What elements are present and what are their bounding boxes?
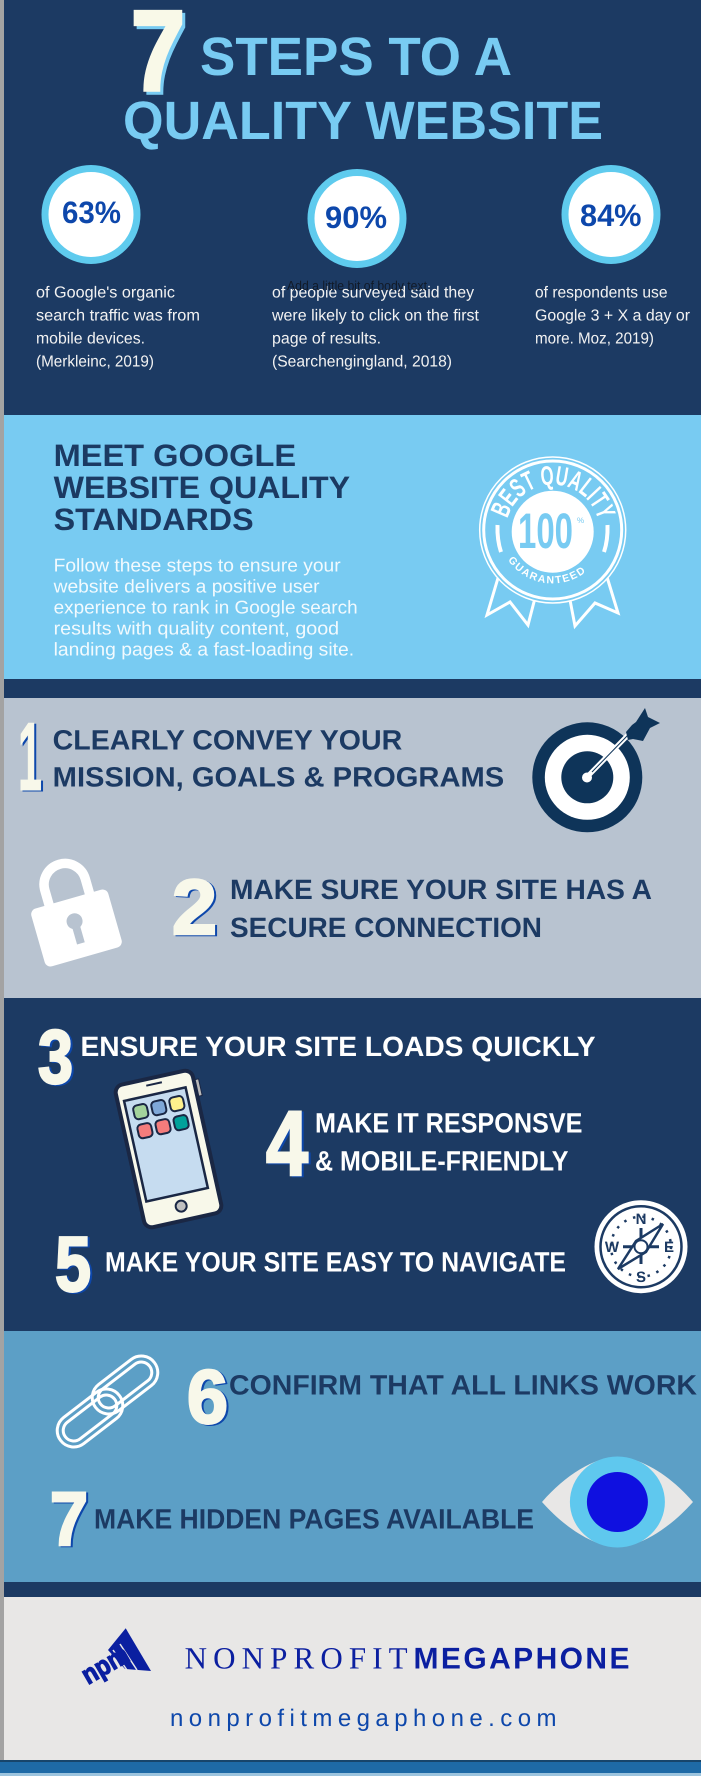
bottom strip <box>0 1760 701 1776</box>
step 7 heading: MAKE HIDDEN PAGES AVAILABLE <box>94 1504 534 1535</box>
stat: 90%: Add a little bit of body text <box>287 278 427 293</box>
stat: 84% <box>535 168 691 348</box>
panel: footer <box>4 1597 701 1760</box>
icon: best quality badge: 100 <box>518 503 573 559</box>
step 2 heading <box>230 874 652 943</box>
stat: 63%: 63% <box>62 195 121 230</box>
icon: best quality badge <box>478 456 626 630</box>
paragraph: landing pages & a fast-loading site. <box>54 639 354 660</box>
stat: 90%: page of results. <box>272 330 381 348</box>
heading: WEBSITE QUALITY <box>54 470 350 505</box>
step 2 heading: MAKE SURE YOUR SITE HAS A <box>230 874 652 905</box>
stat: 63%: mobile devices. <box>36 330 145 348</box>
heading: STANDARDS <box>54 502 254 537</box>
icon: compass: S <box>636 1269 646 1286</box>
step 4 number: 4 <box>266 1093 308 1195</box>
panel: steps 3, 4 and 5 <box>4 998 701 1331</box>
step 6 heading: CONFIRM THAT ALL LINKS WORK <box>229 1370 697 1401</box>
stat: 84%: of respondents use <box>535 284 668 302</box>
step 4 heading: MAKE IT RESPONSVE <box>315 1108 582 1139</box>
logo: megaphone: npm <box>76 1639 134 1690</box>
stat: 63%: of Google's organic <box>36 284 175 302</box>
step 1 heading: CLEARLY CONVEY YOUR <box>53 724 402 756</box>
panel: steps 6 and 7 <box>4 1331 701 1582</box>
stat: 90%: were likely to click on the first <box>271 308 480 324</box>
step 1 heading: MISSION, GOALS & PROGRAMS <box>53 762 504 793</box>
stat: 63%: (Merkleinc, 2019) <box>36 354 154 370</box>
step 3 number: 3 <box>38 1015 73 1100</box>
step 4 heading: & MOBILE-FRIENDLY <box>315 1146 569 1177</box>
step 1 heading <box>53 724 504 793</box>
step 3 heading: ENSURE YOUR SITE LOADS QUICKLY <box>80 1031 596 1062</box>
icon: best quality badge: GUARANTEED <box>509 557 584 584</box>
title: STEPS TO A <box>200 27 512 87</box>
icon: best quality badge: BEST QUALITY <box>490 466 616 518</box>
panel: steps 1 and 2 <box>4 698 701 998</box>
title <box>123 0 603 151</box>
icon: compass: N <box>636 1211 646 1228</box>
paragraph <box>53 555 358 660</box>
step 2 heading: SECURE CONNECTION <box>230 912 542 943</box>
icon: compass: W <box>605 1239 620 1256</box>
panel: header with title and statistics <box>4 0 701 415</box>
stat: 63% <box>36 168 200 370</box>
brand name <box>185 1641 630 1676</box>
step 4 heading <box>315 1108 582 1177</box>
icon: compass <box>594 1200 688 1293</box>
icon: eye <box>542 1456 693 1548</box>
website url: nonprofitmegaphone.com <box>170 1705 556 1732</box>
stat: 90%: 90% <box>325 200 387 235</box>
icon: smartphone <box>114 1068 228 1229</box>
paragraph: results with quality content, good <box>54 618 339 639</box>
icon: best quality badge: % <box>577 516 584 525</box>
step 5 number: 5 <box>55 1220 91 1308</box>
stat: 90% <box>271 172 480 370</box>
paragraph: Follow these steps to ensure your <box>54 555 341 576</box>
icon: padlock <box>20 854 123 968</box>
paragraph: website delivers a positive user <box>53 576 320 597</box>
icon: chain link <box>51 1349 164 1454</box>
step 7 number: 7 <box>50 1477 88 1562</box>
heading <box>54 438 350 537</box>
brand name: MEGAPHONE <box>414 1643 630 1676</box>
stat: 84%: 84% <box>580 198 642 233</box>
stat: 90%: of people surveyed said they <box>272 284 474 302</box>
step 2 number: 2 <box>172 863 217 951</box>
title: QUALITY WEBSITE <box>123 91 603 151</box>
paragraph: experience to rank in Google search <box>54 597 358 618</box>
stat: 84%: more. Moz, 2019) <box>535 330 654 348</box>
step 6 number: 6 <box>187 1355 228 1440</box>
panel: steps 1 and 2: 1 <box>18 702 42 811</box>
left gray screenshot edge <box>0 0 4 1760</box>
brand name: NONPROFIT <box>185 1641 408 1676</box>
icon: compass: E <box>664 1239 674 1256</box>
stat: 63%: search traffic was from <box>36 308 200 324</box>
step 5 heading: MAKE YOUR SITE EASY TO NAVIGATE <box>105 1247 566 1278</box>
stat: 90%: (Searchengingland, 2018) <box>272 354 452 370</box>
heading: MEET GOOGLE <box>54 438 296 473</box>
icon: target with arrow <box>532 708 660 832</box>
stat: 84%: Google 3 + X a day or <box>535 308 691 324</box>
panel: meet Google standards <box>4 415 701 679</box>
